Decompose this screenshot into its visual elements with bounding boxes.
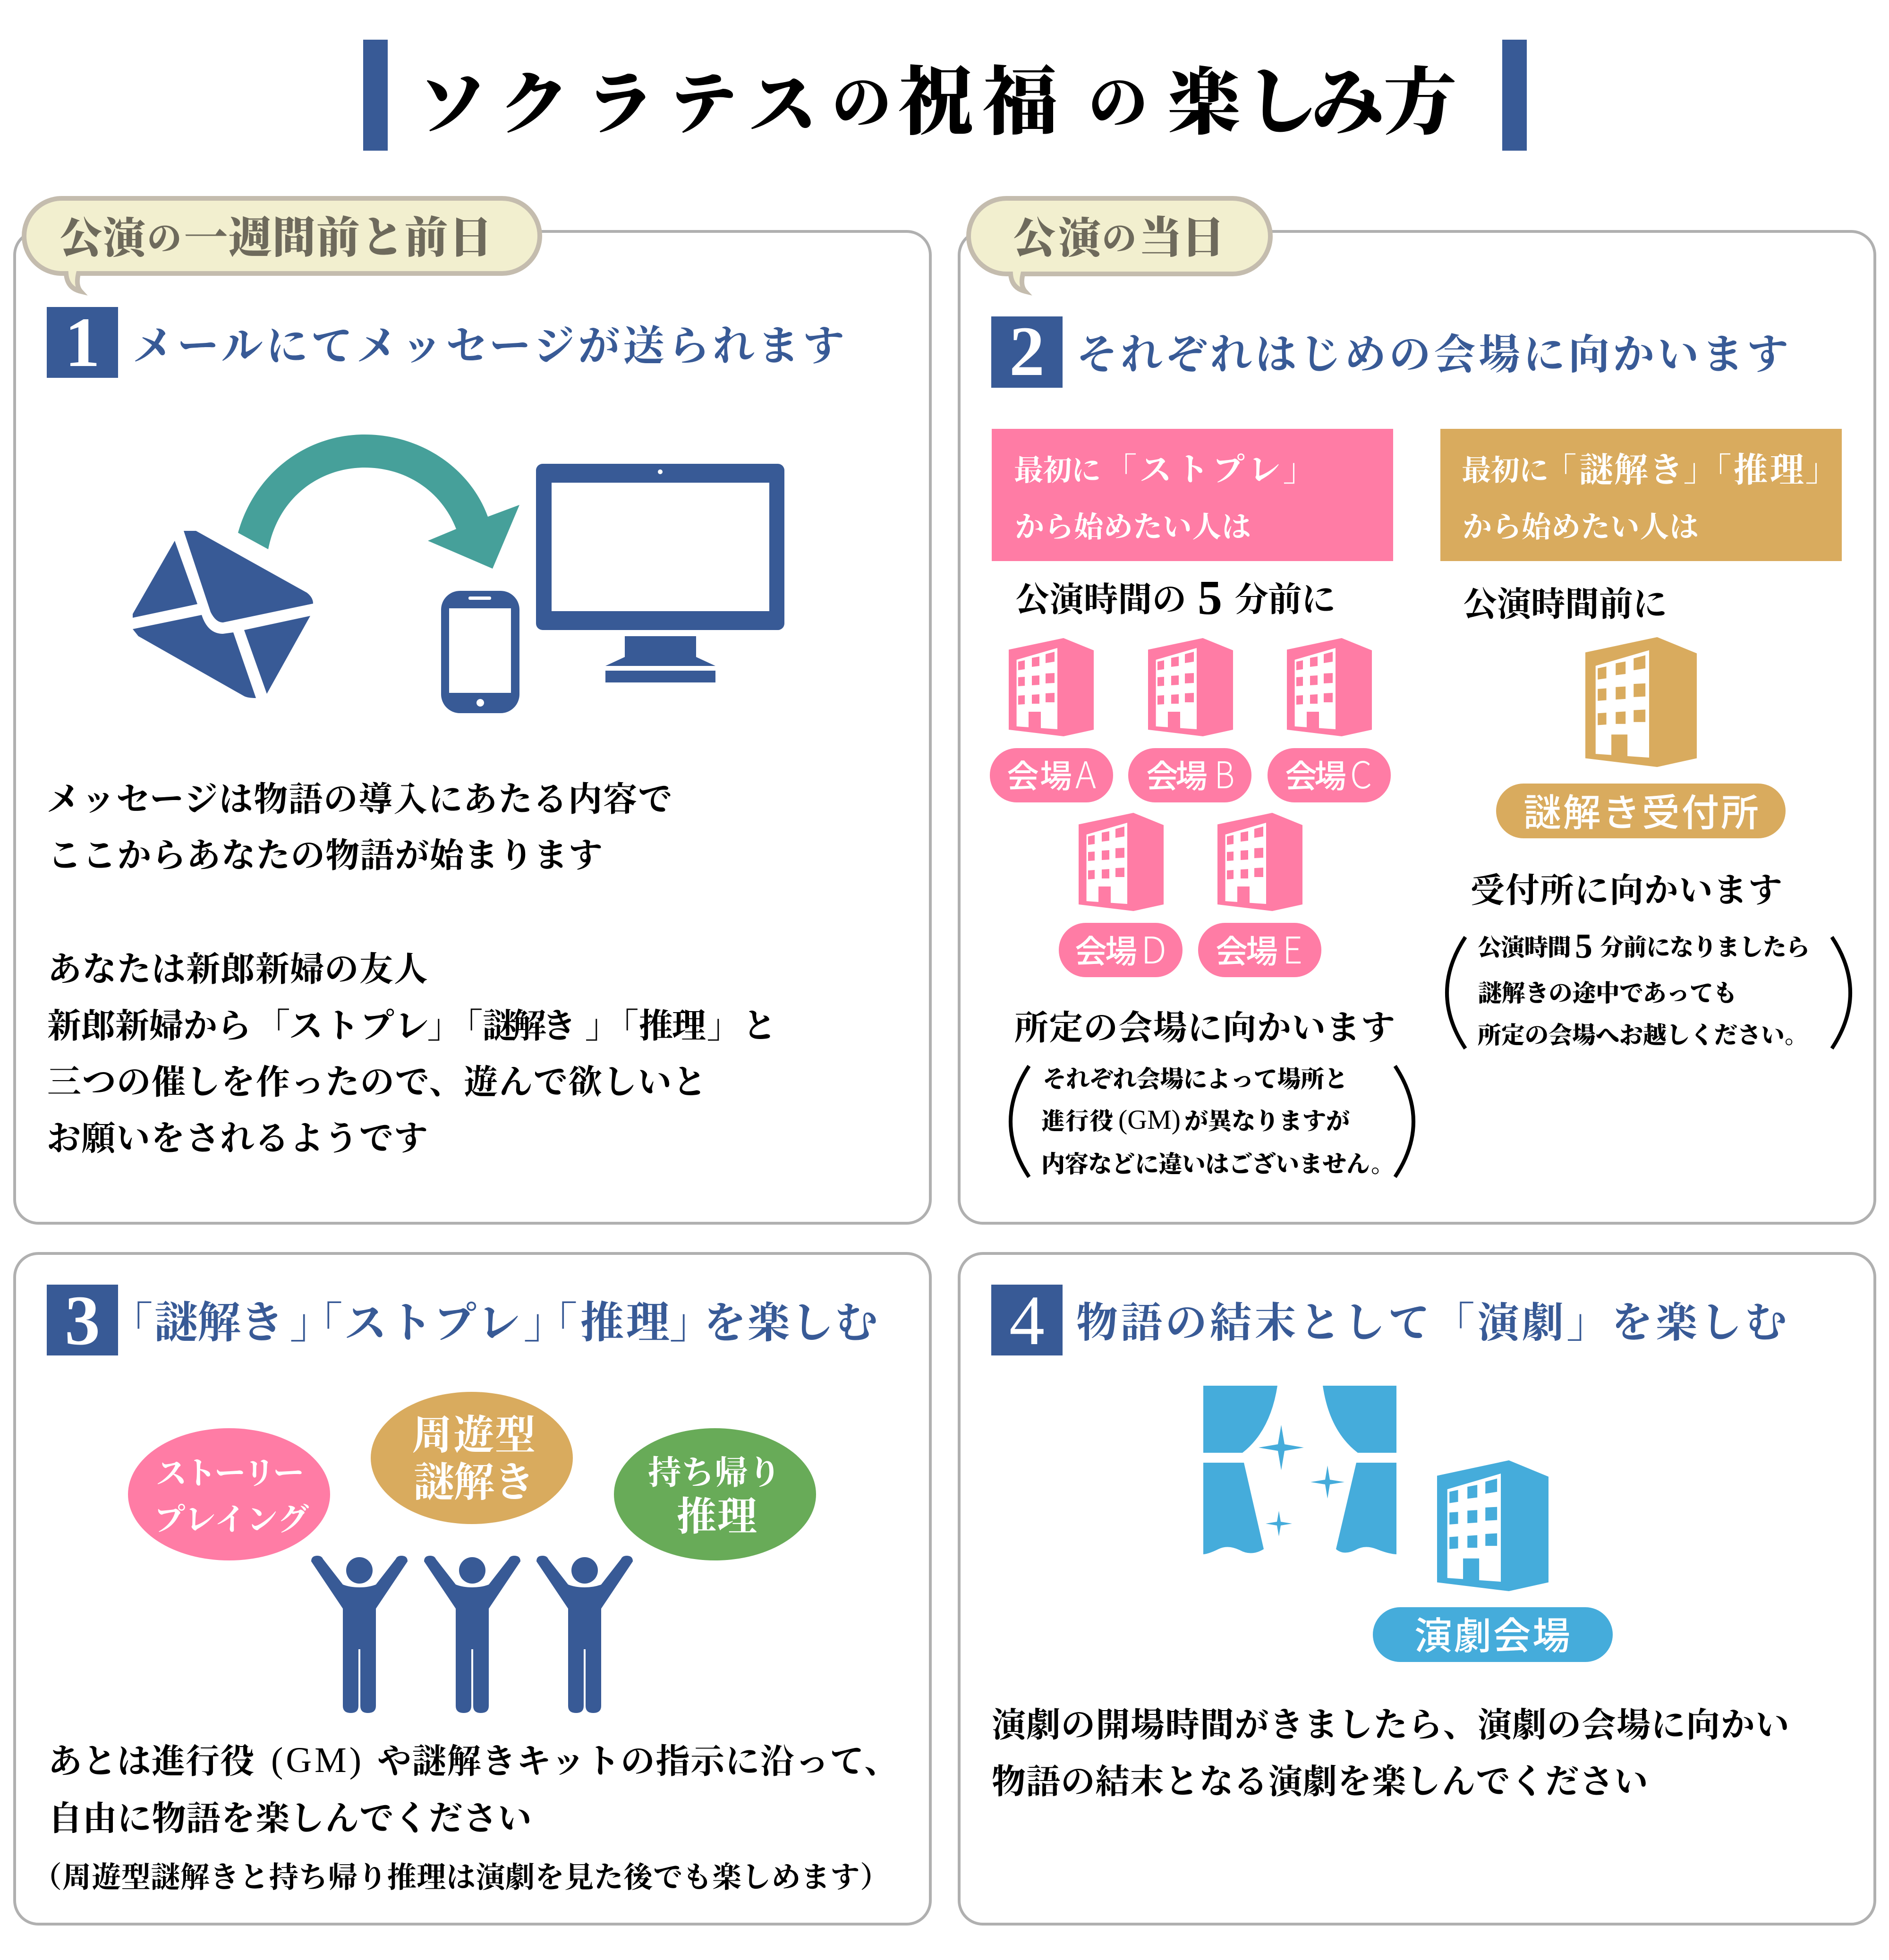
pink header: 「 [1105, 444, 1137, 490]
column: mystery first [1440, 429, 1850, 1050]
tan header: 謎解き [1579, 443, 1683, 492]
bracket note: が異なりますが [1184, 1102, 1350, 1136]
bracket note: (GM) [1118, 1104, 1181, 1135]
step 4 text: 物語の結末となる演劇を楽しんでください [992, 1754, 1648, 1803]
step 3 text: あとは進行役 [48, 1734, 254, 1783]
bubble: take-home deduction: 持ち帰り [648, 1446, 781, 1494]
step 2 heading: それぞれはじめの会場に向かいます [1076, 322, 1788, 381]
speech bubble: one week before: 公演 [60, 204, 153, 265]
step 1 text: ここからあなたの物語が始まります [48, 828, 603, 877]
step 1 heading: メールにてメッセージが送られます [132, 313, 844, 373]
reception pill [1496, 784, 1786, 838]
venue E: E [1283, 921, 1302, 974]
step 1 text: お願いをされるようです [47, 1111, 428, 1160]
mystery reception building [1585, 637, 1697, 767]
title: 祝福 [898, 43, 1057, 150]
panel: step 4 [959, 1253, 1875, 1924]
step 1 text: 」 [427, 998, 461, 1048]
five minutes before: 公演時間の [1015, 572, 1186, 621]
step 1 text: 推理 [639, 998, 706, 1048]
step 3 heading: を楽しむ [704, 1288, 877, 1350]
step 3 heading: 謎解き [154, 1288, 284, 1350]
bracket note: 内容などに違いはございません。 [1041, 1145, 1395, 1179]
tan header: 」 [1805, 444, 1838, 490]
step 3 heading: 「 [535, 1288, 577, 1350]
five minutes before [1015, 571, 1336, 625]
venue C [1268, 638, 1391, 802]
step 3 heading: 推理 [580, 1288, 670, 1350]
venue B: 会場 [1146, 759, 1208, 795]
bracket note: 公演時間 [1478, 929, 1571, 963]
tan header [1440, 429, 1842, 561]
bubble: story playing: プレイング [154, 1494, 309, 1539]
step 2 number [991, 312, 1063, 391]
pink header: ストプレ [1140, 444, 1280, 490]
reception pill: 謎解き受付所 [1523, 792, 1759, 834]
theatre pill [1373, 1607, 1613, 1662]
icon: message flow [133, 435, 784, 713]
speech bubble: day of show: 当日 [1139, 203, 1225, 265]
step 1 text [46, 772, 776, 1160]
icon: curtain with sparkles [1203, 1386, 1396, 1554]
step 1 text: 「 [604, 998, 638, 1048]
speech bubble: day of show: 公演 [1013, 204, 1108, 265]
bracket note: それぞれ会場によって場所と [1043, 1060, 1348, 1094]
venue E [1198, 813, 1321, 977]
speech bubble: day of show: の [1102, 211, 1136, 260]
tan header: 最初に [1462, 447, 1549, 489]
venue B: B [1215, 746, 1234, 799]
step 4 heading: 物語の結末として「演劇」を楽しむ [1076, 1290, 1787, 1349]
title: ソクラテス [419, 50, 817, 148]
panel: step 1 [15, 198, 930, 1223]
pink header [992, 429, 1393, 561]
panel: step 3 [15, 1253, 930, 1924]
step 1 text: ストプレ [289, 998, 429, 1048]
step 1 text: 」 [585, 998, 619, 1048]
venue C: C [1350, 746, 1372, 799]
step 1 text: 謎解き [483, 998, 576, 1048]
go to venue: 所定の会場に向かいます [1014, 1000, 1395, 1049]
bracket note [1447, 927, 1850, 1050]
title: 楽しみ方 [1167, 44, 1457, 149]
step 3 text: （周遊型謎解きと持ち帰り推理は演劇を見た後でも楽しめます） [33, 1854, 889, 1896]
step 1 text: あなたは新郎新婦の友人 [48, 942, 428, 991]
step 1 text: 「 [449, 998, 483, 1048]
arrow [238, 435, 519, 569]
step 4 text [992, 1697, 1789, 1803]
icon: desktop monitor [536, 464, 784, 682]
column: story-play first [990, 429, 1413, 1179]
step 3 heading: 」 [524, 1288, 566, 1350]
title: の [832, 55, 891, 140]
venue A [990, 638, 1113, 802]
step 3 text: や謎解きキットの指示に沿って、 [377, 1734, 898, 1783]
venue B [1128, 638, 1251, 802]
bracket note: 進行役 [1041, 1102, 1113, 1136]
step 1 text: 「 [256, 998, 290, 1048]
bubble: tour mystery: 周遊型 [412, 1402, 536, 1461]
venue D: D [1141, 921, 1166, 974]
tan header: 推理 [1734, 443, 1804, 492]
step 2 number: 2 [1009, 312, 1045, 391]
speech bubble: one week before: 一週間前と前日 [184, 203, 492, 265]
icon: envelope [133, 531, 313, 698]
pink header: 」 [1283, 444, 1315, 490]
icon: smartphone [441, 591, 519, 713]
step 3 number [47, 1281, 118, 1360]
bracket note: 分前になりましたら [1600, 929, 1810, 963]
step 1 text: 」 [707, 998, 741, 1048]
step 1 number [47, 303, 118, 382]
step 1 text: 三つの催しを作ったので、遊んで欲しいと [47, 1055, 706, 1104]
speech bubble: one week before [24, 198, 540, 291]
step 3 heading: 「 [110, 1288, 153, 1350]
title [363, 40, 1527, 151]
step 3 number: 3 [65, 1281, 100, 1360]
before showtime: 公演時間前に [1463, 577, 1667, 626]
pink header: から始めたい人は [1015, 503, 1251, 545]
venue A: 会場 [1007, 759, 1072, 795]
bracket note: 謎解きの途中であっても [1478, 974, 1737, 1008]
bubble: story playing: ストーリー [156, 1448, 304, 1493]
step 4 number [991, 1281, 1063, 1360]
icon: cheering people [311, 1556, 633, 1713]
step 1 text: 新郎新婦から [47, 998, 251, 1048]
go to reception: 受付所に向かいます [1471, 863, 1782, 912]
bubble: take-home deduction [614, 1428, 816, 1560]
step 1 text: メッセージは物語の導入にあたる内容で [46, 772, 672, 821]
title: の [1089, 55, 1148, 140]
theatre pill: 演劇会場 [1414, 1615, 1570, 1657]
bubble: tour mystery [371, 1392, 573, 1524]
tan header: 「 [1544, 444, 1576, 490]
step 3 text: 自由に物語を楽しんでください [48, 1791, 532, 1840]
step 3 heading: ストプレ [344, 1288, 520, 1350]
step 3 text [33, 1734, 898, 1896]
bubble: take-home deduction: 推理 [677, 1485, 757, 1542]
bracket note: 所定の会場へお越しください。 [1478, 1016, 1808, 1050]
bracket note: 5 [1575, 927, 1592, 966]
panel: step 2 [959, 198, 1875, 1223]
speech bubble: one week before: の [147, 211, 181, 260]
step 3 heading: 」 [290, 1288, 332, 1350]
icon: theatre building [1437, 1460, 1549, 1591]
speech bubble: day of show [969, 198, 1270, 291]
pink header: 最初に [1014, 447, 1101, 489]
bubble: story playing [128, 1428, 330, 1560]
bubble: tour mystery: 謎解き [414, 1449, 535, 1508]
venue D: 会場 [1075, 934, 1137, 970]
venue C: 会場 [1285, 759, 1346, 795]
five minutes before: 分前に [1234, 572, 1336, 621]
step 3 heading: 「 [300, 1288, 342, 1350]
tan header: から始めたい人は [1463, 503, 1699, 545]
step 3 text: (GM) [271, 1740, 361, 1780]
step 1 number: 1 [65, 303, 100, 382]
venue E: 会場 [1216, 934, 1278, 970]
tan header: 」 [1684, 444, 1716, 490]
five minutes before: 5 [1198, 571, 1222, 625]
step 3 heading: 」 [670, 1288, 712, 1350]
tan header: 「 [1699, 444, 1731, 490]
venue A: A [1075, 746, 1096, 799]
bracket note [1011, 1060, 1413, 1179]
step 3 heading [110, 1288, 877, 1350]
step 4 number: 4 [1009, 1281, 1045, 1360]
step 1 text: と [742, 998, 776, 1048]
step 4 text: 演劇の開場時間がきましたら、演劇の会場に向かい [992, 1697, 1789, 1747]
venue D [1059, 813, 1183, 977]
